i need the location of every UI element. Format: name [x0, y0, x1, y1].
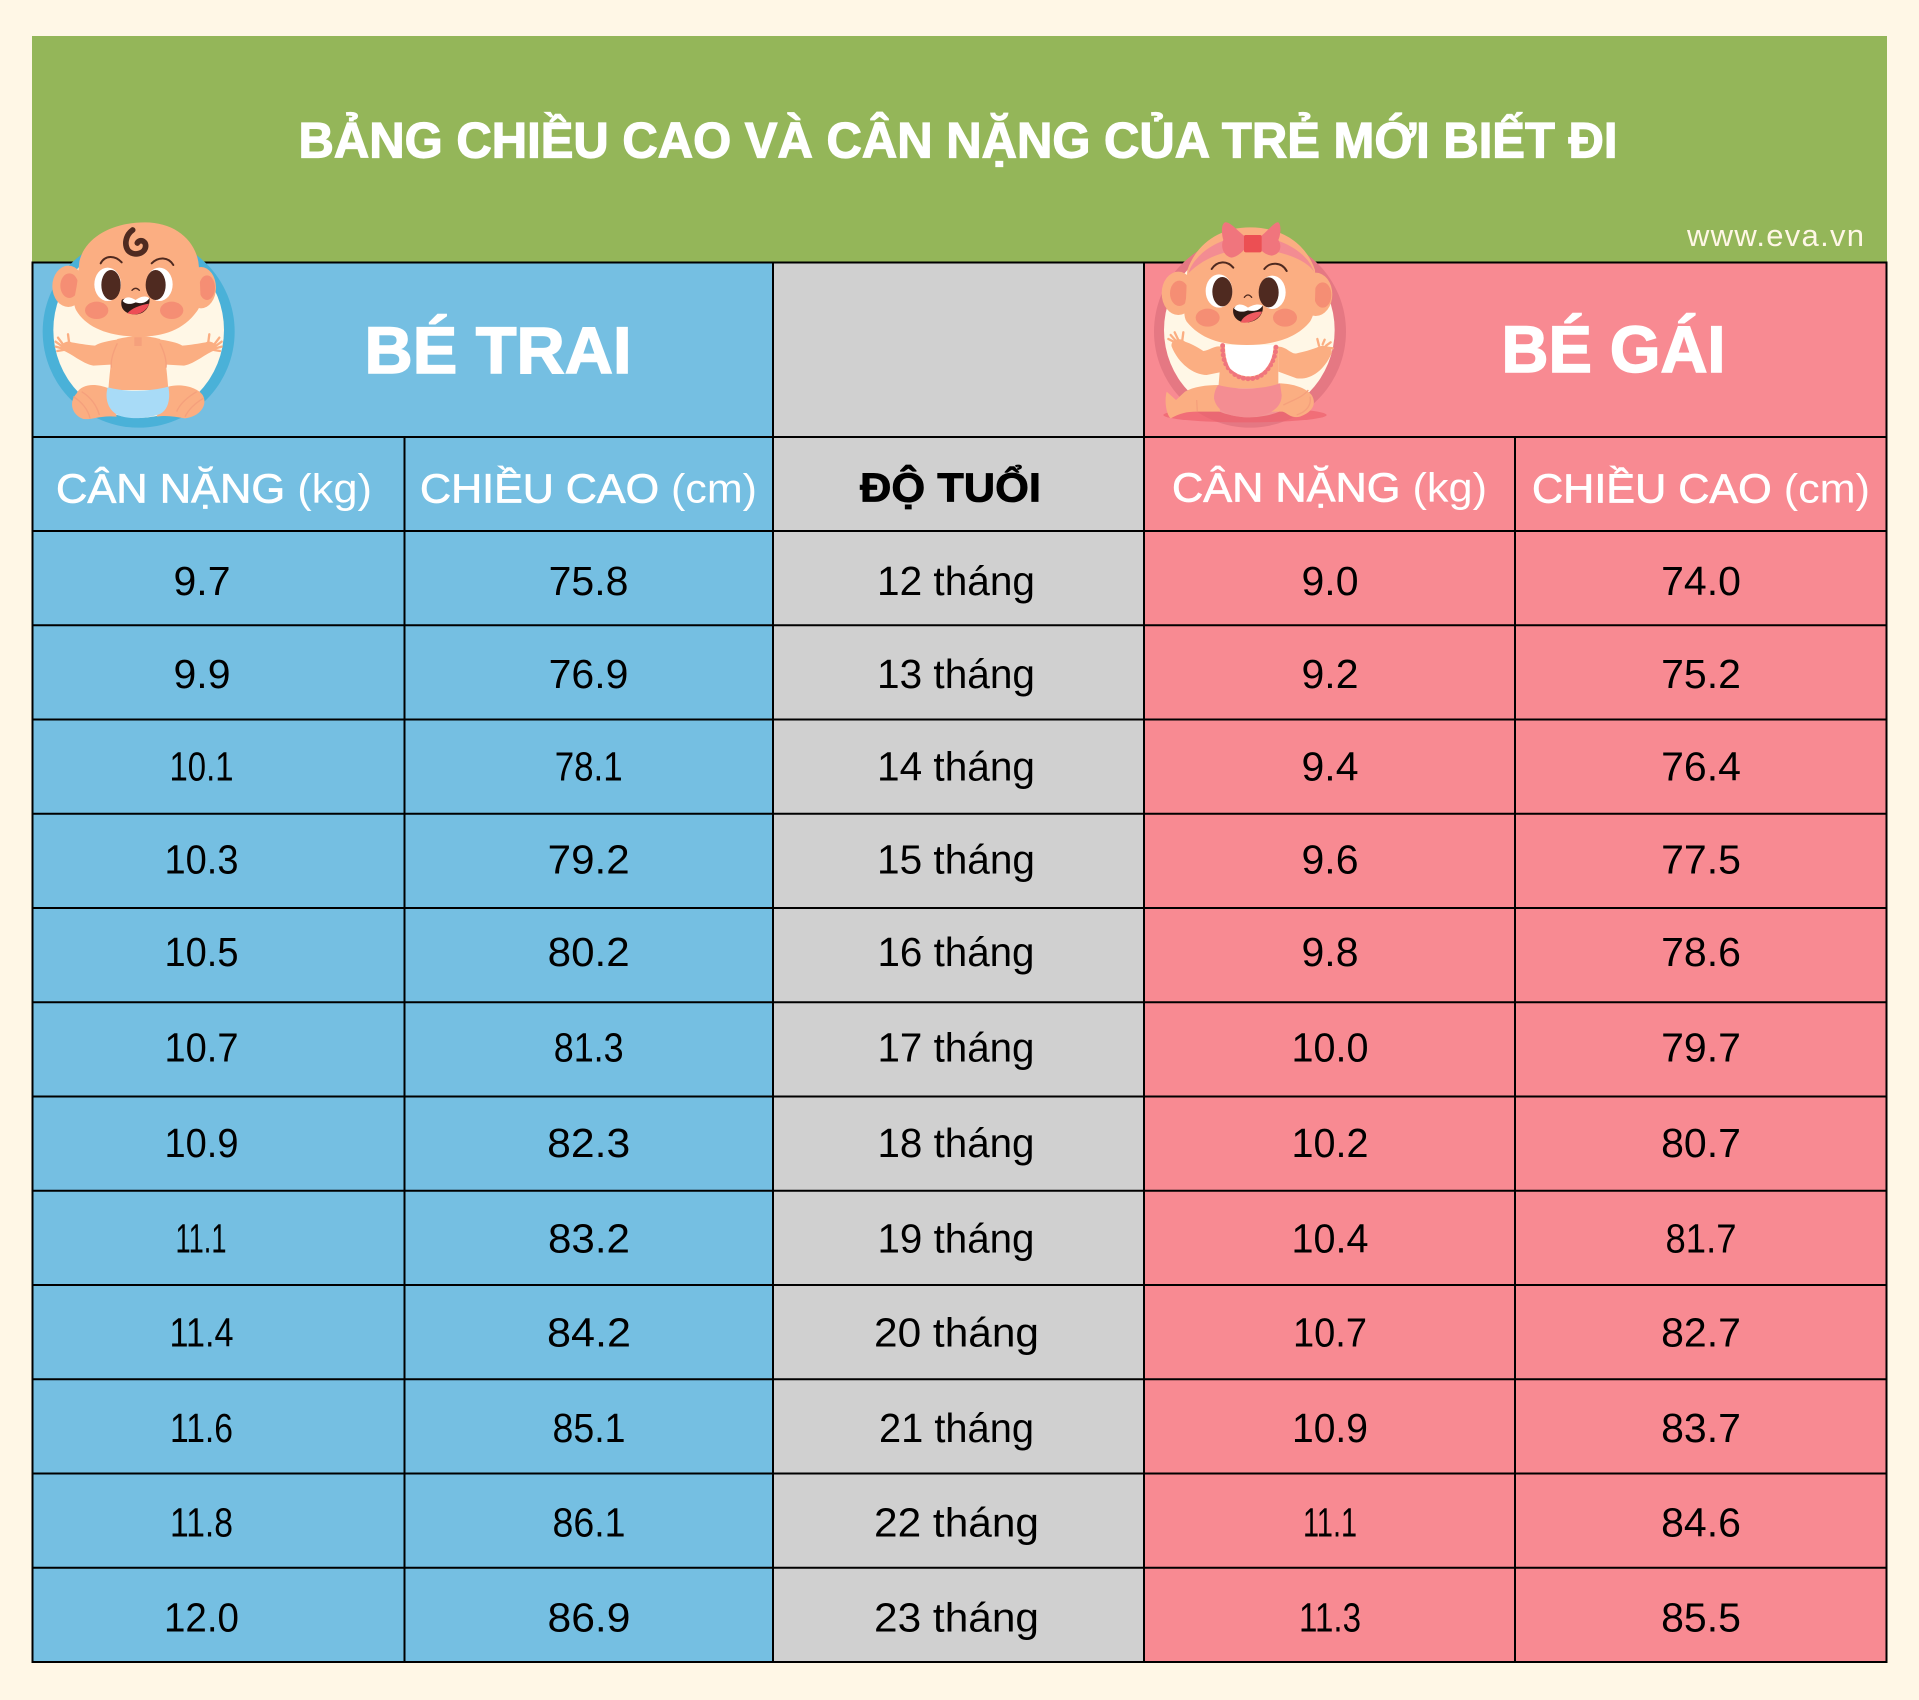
row: 20 tháng: 20 tháng: [874, 1310, 1039, 1356]
row: 20 tháng: 11.4: [170, 1310, 234, 1356]
row: 22 tháng: 22 tháng: [874, 1499, 1039, 1545]
header: boy height: CHIỀU CAO (cm): [420, 466, 757, 512]
row: 19 tháng: 81.7: [1666, 1215, 1736, 1261]
row: 13 tháng: 9.2: [1302, 651, 1358, 697]
row: 19 tháng: 10.4: [1292, 1215, 1368, 1261]
row: 13 tháng: 9.9: [174, 651, 230, 697]
heading: BÉ GÁI: BÉ GÁI: [1502, 312, 1726, 386]
title banner: [32, 36, 1887, 262]
row: 21 tháng: 85.1: [552, 1405, 626, 1451]
row: 18 tháng: 10.9: [164, 1120, 238, 1166]
row: 17 tháng: 17 tháng: [878, 1025, 1034, 1071]
row: 21 tháng: 10.9: [1292, 1405, 1368, 1451]
row: 23 tháng: 11.3: [1299, 1595, 1361, 1641]
row: 23 tháng: 86.9: [548, 1595, 630, 1641]
row: 19 tháng: 83.2: [548, 1215, 630, 1261]
heading: BÉ TRAI: BÉ TRAI: [364, 313, 632, 387]
row: 13 tháng: 75.2: [1661, 651, 1741, 697]
row: 17 tháng: 79.7: [1661, 1025, 1741, 1071]
panel: boy column background: [32, 262, 773, 1662]
row: 14 tháng: 9.4: [1302, 744, 1358, 790]
row: 22 tháng: 11.1: [1303, 1499, 1357, 1545]
row: 12 tháng: 75.8: [549, 558, 628, 604]
row: 14 tháng: [170, 744, 1741, 790]
row: 12 tháng: 12 tháng: [877, 558, 1035, 604]
row: 12 tháng: 74.0: [1661, 558, 1741, 604]
icon: baby girl: [1154, 222, 1346, 428]
row: 23 tháng: 23 tháng: [874, 1595, 1039, 1641]
row: 21 tháng: 83.7: [1661, 1405, 1741, 1451]
row: 15 tháng: [164, 836, 1741, 882]
row: 12 tháng: [174, 558, 1741, 604]
row: 12 tháng: 9.0: [1302, 558, 1358, 604]
row: 21 tháng: 11.6: [170, 1405, 233, 1451]
row: 13 tháng: [174, 651, 1741, 697]
row: 19 tháng: 19 tháng: [878, 1215, 1034, 1261]
row: 18 tháng: 18 tháng: [878, 1120, 1034, 1166]
row: 15 tháng: 10.3: [164, 836, 238, 882]
row: 20 tháng: 84.2: [547, 1310, 631, 1356]
row: 17 tháng: [164, 1025, 1741, 1071]
header: boy weight: CÂN NẶNG (kg): [56, 466, 372, 512]
row: 18 tháng: 10.2: [1292, 1120, 1368, 1166]
row: 20 tháng: 82.7: [1661, 1310, 1741, 1356]
row: 14 tháng: 10.1: [170, 744, 234, 790]
header: girl weight: CÂN NẶNG (kg): [1172, 465, 1487, 511]
row: 23 tháng: [164, 1595, 1741, 1641]
panel: girl column background: [1144, 262, 1887, 1662]
row: 21 tháng: 21 tháng: [879, 1405, 1034, 1451]
row: 13 tháng: 13 tháng: [877, 651, 1035, 697]
row: 17 tháng: 10.0: [1292, 1025, 1368, 1071]
row: 20 tháng: 10.7: [1293, 1310, 1367, 1356]
row: 22 tháng: [170, 1499, 1741, 1545]
row: 22 tháng: 11.8: [170, 1499, 233, 1545]
row: 23 tháng: 85.5: [1661, 1595, 1741, 1641]
row: 17 tháng: 81.3: [554, 1025, 624, 1071]
row: 20 tháng: [170, 1310, 1741, 1356]
row: 15 tháng: 9.6: [1302, 836, 1358, 882]
row: 18 tháng: [164, 1120, 1741, 1166]
row: 12 tháng: 9.7: [174, 558, 230, 604]
row: 14 tháng: 78.1: [555, 744, 623, 790]
row: 16 tháng: 78.6: [1661, 929, 1741, 975]
row: 23 tháng: 12.0: [164, 1595, 239, 1641]
row: 15 tháng: 79.2: [548, 836, 630, 882]
column headers: [56, 464, 1870, 512]
row: 18 tháng: 80.7: [1661, 1120, 1741, 1166]
row: 16 tháng: [164, 929, 1741, 975]
panel: age column background: [773, 262, 1144, 1662]
row: 14 tháng: 76.4: [1661, 744, 1741, 790]
row: 13 tháng: 76.9: [549, 651, 628, 697]
row: 19 tháng: [176, 1215, 1736, 1261]
row: 19 tháng: 11.1: [176, 1215, 226, 1261]
row: 16 tháng: 80.2: [548, 929, 630, 975]
row: 22 tháng: 86.1: [552, 1499, 626, 1545]
header: girl height: CHIỀU CAO (cm): [1532, 466, 1870, 512]
row: 14 tháng: 14 tháng: [877, 744, 1035, 790]
row: 22 tháng: 84.6: [1661, 1499, 1741, 1545]
icon: baby boy: [43, 222, 235, 428]
source url: www.eva.vn: [1686, 218, 1864, 253]
row: 16 tháng: 10.5: [164, 929, 238, 975]
row: 15 tháng: 15 tháng: [877, 836, 1035, 882]
title: BẢNG CHIỀU CAO VÀ CÂN NẶNG CỦA TRẺ MỚI BIẾT ĐI: [298, 112, 1618, 168]
row: 16 tháng: 16 tháng: [878, 929, 1034, 975]
row: 17 tháng: 10.7: [164, 1025, 238, 1071]
row: 16 tháng: 9.8: [1302, 929, 1358, 975]
row: 21 tháng: [170, 1405, 1741, 1451]
row: 18 tháng: 82.3: [547, 1120, 630, 1166]
row: 15 tháng: 77.5: [1661, 836, 1741, 882]
table: [32, 262, 1887, 1662]
header: age: ĐỘ TUỔI: [860, 464, 1041, 511]
